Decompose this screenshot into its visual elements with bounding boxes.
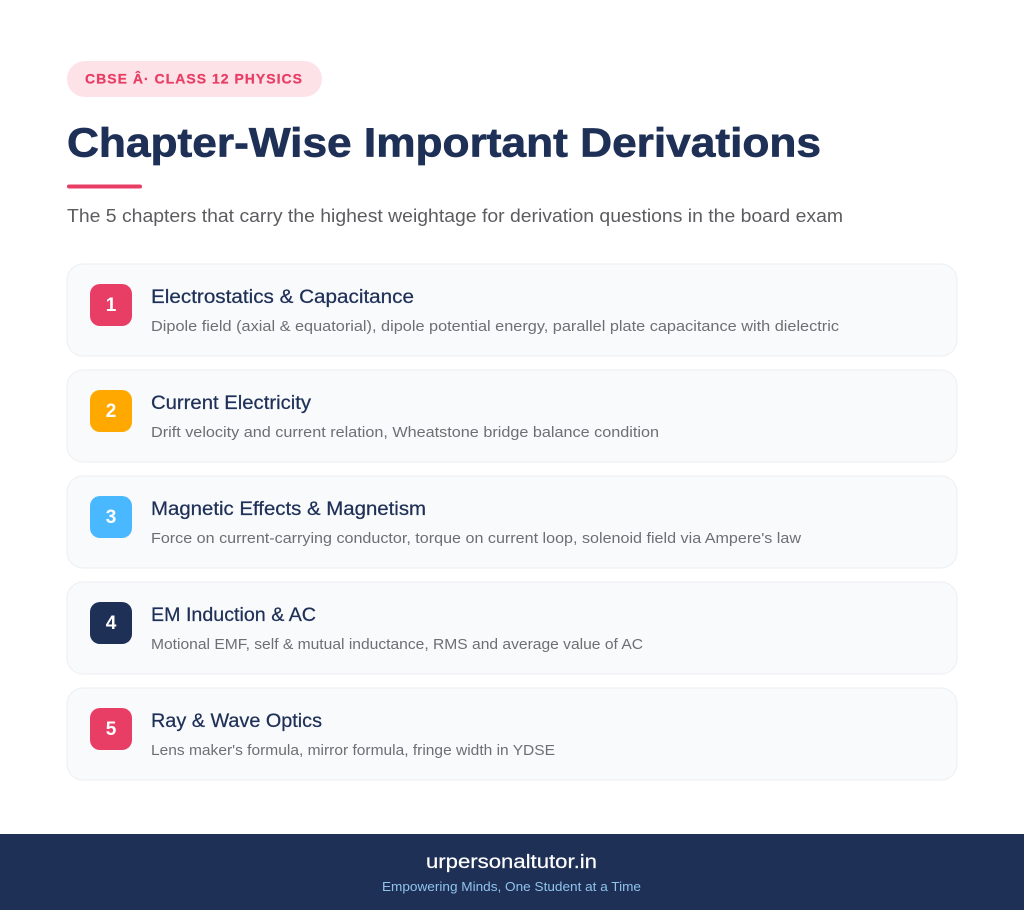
panel: chapter 5 bbox=[67, 688, 957, 780]
icon: number 4: 4 bbox=[106, 613, 117, 634]
panel: chapter 1 bbox=[67, 264, 957, 356]
icon: number 5: 5 bbox=[106, 719, 117, 740]
chapter 4 heading: EM Induction & AC bbox=[151, 605, 316, 626]
icon: number 4 bbox=[90, 602, 132, 644]
chapter 3 derivations: Force on current-carrying conductor, torque on current loop, solenoid field via Ampere's law bbox=[151, 531, 802, 547]
footer tagline: Empowering Minds, One Student at a Time bbox=[382, 879, 641, 894]
panel: chapter 3 bbox=[67, 476, 957, 568]
chapter 1 derivations: Dipole field (axial & equatorial), dipole potential energy, parallel plate capacitance with dielectric bbox=[151, 319, 839, 335]
badge pill: CBSE Â· CLASS 12 PHYSICS bbox=[85, 70, 302, 86]
icon: number 3: 3 bbox=[106, 507, 116, 528]
chapter 5 derivations: Lens maker's formula, mirror formula, fringe width in YDSE bbox=[151, 743, 555, 759]
icon: number 2: 2 bbox=[106, 401, 116, 422]
panel: chapter 2 bbox=[67, 370, 957, 462]
footer bbox=[0, 834, 1024, 910]
badge pill bbox=[67, 61, 322, 97]
icon: number 1 bbox=[90, 284, 132, 326]
chapter 2 heading: Current Electricity bbox=[151, 393, 312, 414]
title: Chapter-Wise Important Derivations bbox=[67, 120, 821, 166]
panel: chapter 4 bbox=[67, 582, 957, 674]
icon: number 3 bbox=[90, 496, 132, 538]
chapter 5 heading: Ray & Wave Optics bbox=[151, 711, 322, 732]
chapter 3 heading: Magnetic Effects & Magnetism bbox=[151, 499, 426, 520]
chapter 4 derivations: Motional EMF, self & mutual inductance, RMS and average value of AC bbox=[151, 637, 643, 653]
icon: number 5 bbox=[90, 708, 132, 750]
icon: number 2 bbox=[90, 390, 132, 432]
chapter 1 heading: Electrostatics & Capacitance bbox=[151, 287, 414, 308]
footer site name: urpersonaltutor.in bbox=[426, 852, 597, 873]
icon: number 1: 1 bbox=[106, 295, 117, 316]
chapter 2 derivations: Drift velocity and current relation, Wheatstone bridge balance condition bbox=[151, 425, 659, 441]
subtitle: The 5 chapters that carry the highest weightage for derivation questions in the board exam bbox=[67, 206, 843, 226]
